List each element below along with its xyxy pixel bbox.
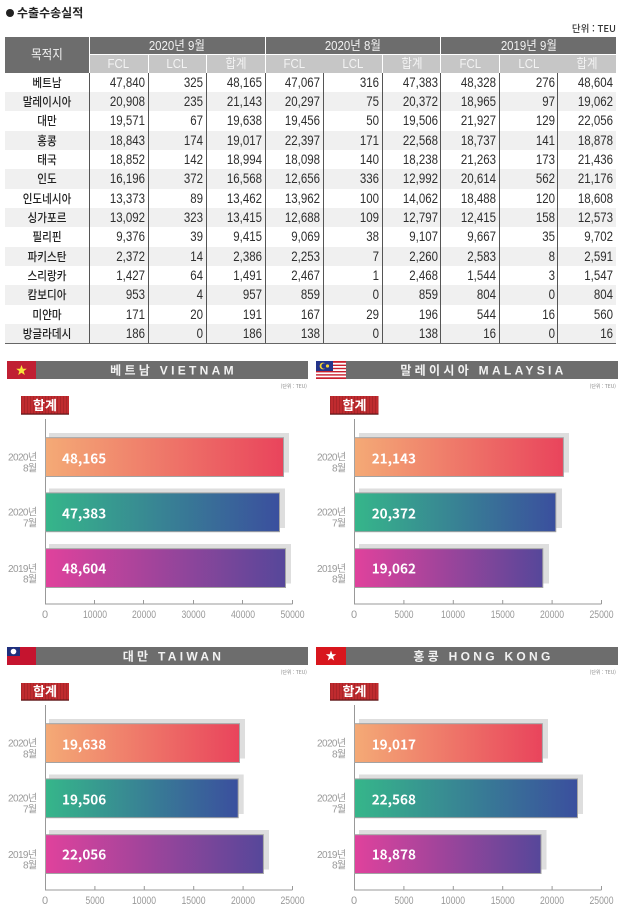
table body: 48,604 <box>578 74 613 90</box>
table header: 2019년 9월 <box>500 38 557 53</box>
table body: 20 <box>190 306 203 322</box>
bar chart: Hong Kong: 8월 <box>332 748 346 760</box>
unit note: (단위 : TEU) <box>590 669 616 676</box>
table body: 12,688 <box>285 209 320 225</box>
bar chart: Vietnam: 8월 <box>23 462 37 474</box>
table body: 12,656 <box>285 170 320 186</box>
table body: 171 <box>360 132 379 148</box>
table header: LCL <box>167 56 188 71</box>
table body: 인도네시아 <box>23 190 71 207</box>
table body: 47,383 <box>402 74 438 90</box>
table body: 20,614 <box>461 170 496 186</box>
table body: 0 <box>548 325 554 341</box>
table body: 0 <box>548 286 554 302</box>
table body: 18,965 <box>461 93 496 109</box>
table header: FCL <box>108 56 129 71</box>
table body: 186 <box>243 325 262 341</box>
bar chart: Hong Kong: 8월 <box>332 860 346 872</box>
table body: 957 <box>243 286 262 302</box>
table body: 100 <box>360 190 379 206</box>
table body: 1,544 <box>467 267 496 283</box>
table body: 47,840 <box>110 74 145 90</box>
table body: 140 <box>360 151 379 167</box>
table body: 13,962 <box>285 190 320 206</box>
bar chart: Taiwan: 5000 <box>86 895 104 907</box>
bar chart: Taiwan: 10000 <box>132 895 156 907</box>
table body: 9,702 <box>584 228 613 244</box>
table body: 64 <box>190 267 203 283</box>
panel: Hong Kong <box>316 647 618 907</box>
table header: FCL <box>459 56 481 71</box>
header: Malaysia: 말레이시아 MALAYSIA <box>400 362 567 378</box>
panel: Vietnam <box>7 361 308 621</box>
bar chart: Malaysia: 2020년 <box>317 506 346 518</box>
table body: 804 <box>477 286 496 302</box>
table body: 14,062 <box>402 190 438 206</box>
table body: 인도 <box>37 170 57 187</box>
badge: total: 합계 <box>33 681 57 700</box>
table body: 120 <box>535 190 554 206</box>
header: Hong Kong <box>346 647 618 665</box>
table body: 47,067 <box>285 74 320 90</box>
table body: 35 <box>542 228 554 244</box>
table body: 544 <box>477 306 496 322</box>
panel: Malaysia <box>316 361 618 621</box>
table body: 171 <box>126 306 145 322</box>
table body: 276 <box>535 74 554 90</box>
table body: 142 <box>184 151 203 167</box>
table body: 173 <box>535 151 554 167</box>
table body: 859 <box>301 286 320 302</box>
table body: 18,098 <box>285 151 320 167</box>
badge: total <box>330 681 378 701</box>
table body: 2,253 <box>291 248 320 264</box>
table body: 97 <box>542 93 554 109</box>
header: Vietnam: 베트남 VIETNAM <box>110 364 237 378</box>
unit note: (단위 : TEU) <box>281 383 307 390</box>
bar chart: Taiwan: 15000 <box>182 895 206 907</box>
table body: 18,852 <box>110 151 145 167</box>
bar chart: Taiwan: 2020년 <box>8 738 37 750</box>
bar chart: Malaysia: 8월 <box>332 462 346 474</box>
bar chart: Malaysia: 7월 <box>332 518 346 530</box>
table body: 19,571 <box>110 112 145 128</box>
bar chart: Malaysia: 21,143 <box>372 448 416 468</box>
table body: 804 <box>594 286 613 302</box>
table body: 3 <box>548 267 554 283</box>
table body: 48,328 <box>461 74 496 90</box>
table body: 18,994 <box>227 151 262 167</box>
bar chart: Vietnam: 20000 <box>132 609 156 621</box>
table header: LCL <box>342 56 363 71</box>
table body: 89 <box>190 190 203 206</box>
table body: 18,608 <box>578 190 613 206</box>
table header: 목적지 <box>31 47 63 62</box>
table body: 20,372 <box>402 93 438 109</box>
header: Hong Kong: 홍콩 HONG KONG <box>413 648 554 664</box>
bar chart: Hong Kong: 15000 <box>491 895 515 907</box>
table body: 12,573 <box>578 209 613 225</box>
table body: 18,843 <box>110 132 145 148</box>
table body: 18,238 <box>402 151 438 167</box>
bar chart: Vietnam: 10000 <box>83 609 107 621</box>
table body: 325 <box>184 74 203 90</box>
bar chart: Vietnam: 40000 <box>231 609 255 621</box>
table body: 2,583 <box>467 248 496 264</box>
table body: 태국 <box>37 151 57 168</box>
table body: 2,468 <box>409 267 438 283</box>
table header: FCL <box>284 56 306 71</box>
badge: total <box>21 681 69 701</box>
table body: 191 <box>243 306 262 322</box>
table body: 138 <box>301 325 320 341</box>
table body: 316 <box>360 74 379 90</box>
bar chart: Taiwan: 7월 <box>23 804 37 816</box>
table body: 미얀마 <box>32 306 62 323</box>
table body: 2,372 <box>116 248 145 264</box>
bar chart: Vietnam: 48,165 <box>62 448 106 468</box>
bar chart: Malaysia: 19,062 <box>372 558 416 578</box>
table body: 859 <box>418 286 438 302</box>
bar chart: Hong Kong: 2020년 <box>317 792 346 804</box>
bar chart: Malaysia: 25000 <box>590 609 614 621</box>
badge: total <box>21 395 69 415</box>
bar chart: Hong Kong: 7월 <box>332 804 346 816</box>
table body: 158 <box>535 209 554 225</box>
table body: 235 <box>184 93 203 109</box>
table body: 2,467 <box>291 267 320 283</box>
bar chart: Malaysia: 20,372 <box>372 502 416 522</box>
table body: 13,415 <box>227 209 262 225</box>
table body: 1 <box>373 267 379 283</box>
table body: 75 <box>366 93 379 109</box>
flag: Vietnam <box>7 361 36 379</box>
flag: Taiwan <box>7 647 36 665</box>
table body: 1,547 <box>584 267 613 283</box>
table body: 19,456 <box>285 112 320 128</box>
table body: 562 <box>535 170 554 186</box>
panel: Taiwan <box>7 647 308 907</box>
table body: 베트남 <box>32 74 62 91</box>
table body: 1,491 <box>233 267 262 283</box>
bar chart: Hong Kong: 20000 <box>540 895 564 907</box>
table header <box>5 37 616 73</box>
table body: 21,143 <box>227 93 262 109</box>
table body: 19,638 <box>227 112 262 128</box>
table body: 말레이시아 <box>23 93 71 110</box>
table body: 21,436 <box>578 151 613 167</box>
bar chart: Malaysia <box>317 419 614 621</box>
table body: 0 <box>373 286 379 302</box>
table body: 38 <box>366 228 379 244</box>
table body: 13,092 <box>110 209 145 225</box>
table body: 19,017 <box>227 132 262 148</box>
bar chart: Taiwan: 19,638 <box>62 734 106 754</box>
table body: 18,878 <box>578 132 613 148</box>
table body: 2,591 <box>584 248 613 264</box>
badge: total <box>330 395 378 415</box>
bar chart: Malaysia: 2019년 <box>317 563 346 575</box>
bar chart: Taiwan: 0 <box>42 895 48 907</box>
unit note: (단위 : TEU) <box>590 383 616 390</box>
bar chart: Hong Kong: 25000 <box>590 895 614 907</box>
bar chart: Malaysia: 15000 <box>491 609 515 621</box>
table body: 12,415 <box>461 209 496 225</box>
bar chart: Taiwan: 25000 <box>280 895 304 907</box>
bar chart: Hong Kong: 18,878 <box>372 844 416 864</box>
bar chart: Vietnam: 47,383 <box>62 502 106 522</box>
table body: 323 <box>184 209 203 225</box>
bar chart: Vietnam: 0 <box>42 609 48 621</box>
table body: 174 <box>184 132 203 148</box>
table body: 29 <box>366 306 379 322</box>
table body: 1,427 <box>116 267 145 283</box>
bar chart: Taiwan: 22,056 <box>62 844 106 864</box>
badge: total: 합계 <box>343 681 366 700</box>
bar chart: Malaysia: 0 <box>351 609 357 621</box>
table body: 캄보디아 <box>28 286 66 303</box>
header: Taiwan <box>36 647 308 665</box>
bar chart: Malaysia: 5000 <box>394 609 414 621</box>
table header: LCL <box>518 56 539 71</box>
table body: 16,196 <box>110 170 145 186</box>
table body: 4 <box>197 286 203 302</box>
table header: 합계 <box>576 56 598 71</box>
table body: 0 <box>373 325 379 341</box>
bar chart: Taiwan: 2019년 <box>8 849 37 861</box>
table body: 16 <box>483 325 496 341</box>
table header: 2020년 8월 <box>325 38 381 53</box>
bar chart: Vietnam: 48,604 <box>62 558 106 578</box>
table body: 필리핀 <box>32 228 62 245</box>
table body: 13,373 <box>110 190 145 206</box>
table body: 560 <box>594 306 613 322</box>
table body: 12,797 <box>402 209 438 225</box>
table header: 합계 <box>401 56 422 71</box>
bar chart: Hong Kong: 2020년 <box>317 738 346 750</box>
table body: 13,462 <box>227 190 262 206</box>
flag: Hong Kong <box>316 647 346 665</box>
bar chart: Taiwan: 2020년 <box>8 792 37 804</box>
table body: 19,062 <box>578 93 613 109</box>
bar chart: Taiwan <box>8 705 304 907</box>
unit note: 단위 : TEU <box>572 21 616 35</box>
bar chart: Taiwan: 19,506 <box>62 788 106 808</box>
table body: 953 <box>126 286 145 302</box>
table body: 18,488 <box>461 190 496 206</box>
table header: 합계 <box>225 56 247 71</box>
table body: 167 <box>301 306 320 322</box>
table body: 파키스탄 <box>28 248 66 265</box>
table body: 20,297 <box>285 93 320 109</box>
table body: 9,107 <box>409 228 438 244</box>
bar chart: Hong Kong <box>317 705 614 907</box>
table body: 138 <box>418 325 438 341</box>
bar chart: Vietnam: 30000 <box>182 609 206 621</box>
table body: 9,376 <box>116 228 145 244</box>
bar chart: Hong Kong: 5000 <box>394 895 414 907</box>
bar chart: Vietnam <box>8 419 304 621</box>
table header: 2020년 9월 <box>149 38 205 53</box>
table body: 129 <box>535 112 554 128</box>
bar chart: Malaysia: 8월 <box>332 574 346 586</box>
bar chart: Hong Kong: 10000 <box>441 895 465 907</box>
table body: 9,415 <box>233 228 262 244</box>
bar chart: Hong Kong: 2019년 <box>317 849 346 861</box>
header: Vietnam <box>36 361 308 379</box>
table body: 196 <box>418 306 438 322</box>
table body: 16 <box>600 325 613 341</box>
table body: 홍콩 <box>37 132 57 149</box>
table body: 48,165 <box>227 74 262 90</box>
table body: 16,568 <box>227 170 262 186</box>
table body: 대만 <box>37 112 57 129</box>
bar chart: Vietnam: 2020년 <box>8 452 37 464</box>
header: Malaysia <box>346 361 618 379</box>
bar chart: Hong Kong: 19,017 <box>372 734 416 754</box>
table body: 0 <box>197 325 203 341</box>
unit note: (단위 : TEU) <box>281 669 307 676</box>
table body: 9,069 <box>291 228 320 244</box>
table body: 14 <box>190 248 203 264</box>
badge: total: 합계 <box>33 395 57 414</box>
table body: 21,927 <box>461 112 496 128</box>
table body: 21,263 <box>461 151 496 167</box>
table body: 22,397 <box>285 132 320 148</box>
table body: 141 <box>535 132 554 148</box>
table body: 12,992 <box>402 170 438 186</box>
table body: 336 <box>360 170 379 186</box>
table body: 16 <box>542 306 554 322</box>
bar chart: Vietnam: 50000 <box>280 609 304 621</box>
bar chart: Malaysia: 10000 <box>441 609 465 621</box>
table body: 2,260 <box>409 248 438 264</box>
table body <box>5 74 616 343</box>
bar chart: Malaysia: 2020년 <box>317 452 346 464</box>
table body: 19,506 <box>402 112 438 128</box>
bar chart: Taiwan: 8월 <box>23 748 37 760</box>
bar chart: Vietnam: 2020년 <box>8 506 37 518</box>
table body: 109 <box>360 209 379 225</box>
table body: 방글라데시 <box>23 325 71 342</box>
bar chart: Hong Kong: 22,568 <box>372 788 416 808</box>
table body: 스리랑카 <box>28 267 66 284</box>
table body: 20,908 <box>110 93 145 109</box>
table body: 21,176 <box>578 170 613 186</box>
table body: 18,737 <box>461 132 496 148</box>
flag: Malaysia <box>316 361 346 379</box>
table body: 372 <box>184 170 203 186</box>
bar chart: Taiwan: 8월 <box>23 860 37 872</box>
bar chart: Hong Kong: 0 <box>351 895 357 907</box>
table body: 39 <box>190 228 203 244</box>
table body: 22,568 <box>402 132 438 148</box>
table body: 2,386 <box>233 248 262 264</box>
bar chart: Vietnam: 7월 <box>23 518 37 530</box>
table body: 22,056 <box>578 112 613 128</box>
badge: total: 합계 <box>343 395 366 414</box>
bar chart: Taiwan: 20000 <box>231 895 255 907</box>
table body: 67 <box>190 112 203 128</box>
table body: 50 <box>366 112 379 128</box>
table body: 8 <box>548 248 554 264</box>
bar chart: Malaysia: 20000 <box>540 609 564 621</box>
table body: 싱가포르 <box>28 209 66 226</box>
table body: 186 <box>126 325 145 341</box>
bar chart: Vietnam: 2019년 <box>8 563 37 575</box>
bar chart: Vietnam: 8월 <box>23 574 37 586</box>
header: Taiwan: 대만 TAIWAN <box>123 650 224 664</box>
table body: 9,667 <box>467 228 496 244</box>
table body: 7 <box>373 248 379 264</box>
title: 수출수송실적 <box>17 4 83 21</box>
